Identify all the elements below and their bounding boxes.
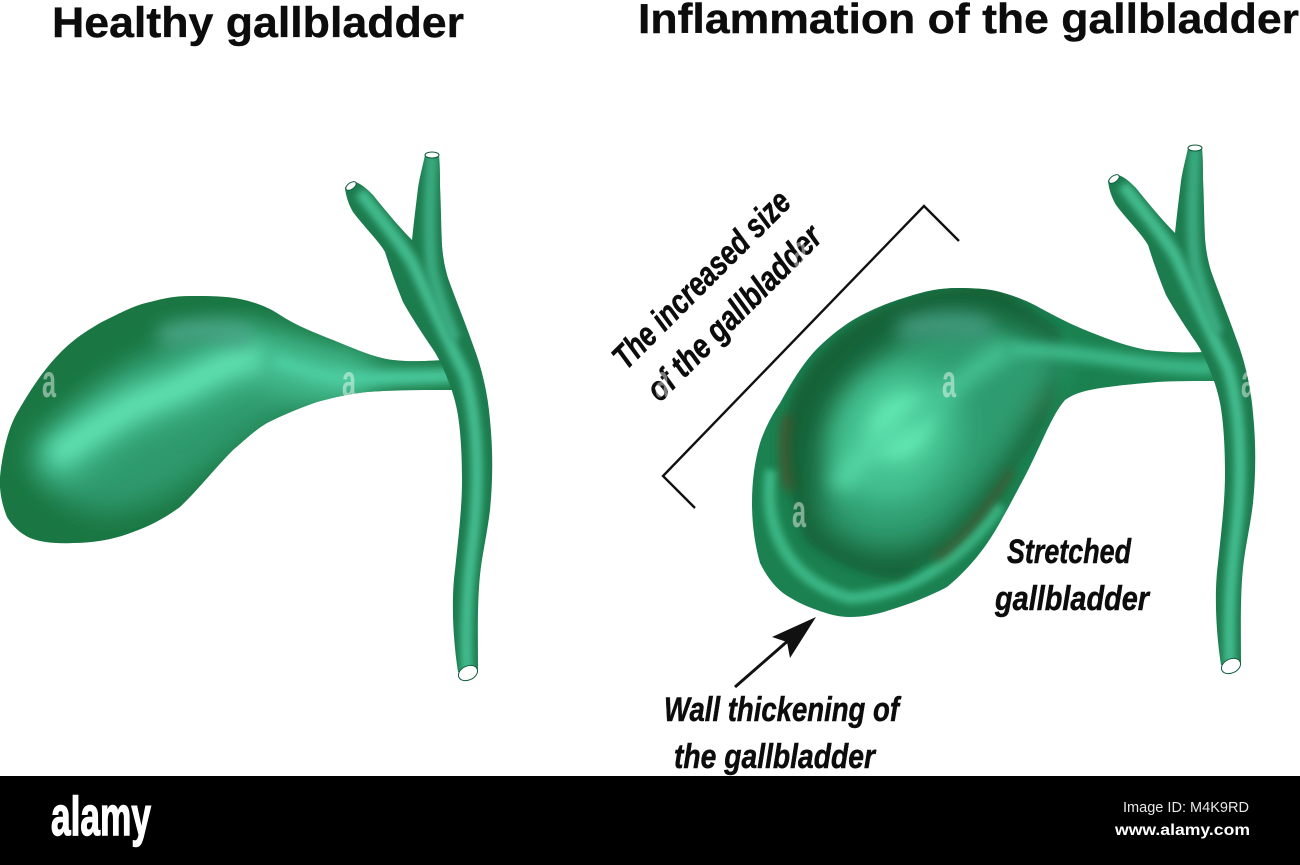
- watermarks: a: [1241, 355, 1255, 407]
- sac mid tone: [821, 322, 1070, 550]
- watermarks: a: [942, 355, 956, 407]
- label: wall thickening: Wall thickening of: [664, 691, 902, 729]
- watermarks: a: [655, 355, 669, 407]
- watermarks: [42, 225, 1255, 537]
- watermarks: a: [792, 485, 806, 537]
- label: the increased size: The increased size: [605, 183, 799, 377]
- healthy bile duct: [345, 156, 492, 672]
- sac teal top: [900, 324, 990, 332]
- neck shading: [1010, 350, 1215, 368]
- bracket: increased size: [663, 206, 959, 508]
- footer logo: alamy: [51, 785, 151, 847]
- title: healthy gallbladder: Healthy gallbladder: [52, 0, 464, 47]
- watermarks: a: [342, 355, 356, 407]
- label: stretched gallbladder: gallbladder: [994, 580, 1150, 618]
- label: wall thickening: the gallbladder: [674, 738, 876, 776]
- illustration: inflamed gallbladder: [745, 138, 1263, 677]
- footer bar: [0, 776, 1300, 865]
- inflamed gallbladder body: [745, 280, 1220, 625]
- brown shading: [784, 415, 790, 490]
- watermarks: a: [42, 355, 56, 407]
- label: stretched gallbladder: Stretched: [1007, 533, 1132, 571]
- arrow: to wall: [735, 617, 816, 687]
- illustration: healthy gallbladder: [0, 145, 500, 684]
- sac glow: [814, 352, 969, 514]
- healthy gallbladder body: [0, 285, 460, 555]
- label: wall thickening: [664, 691, 902, 776]
- inner sac shadow: [786, 285, 1060, 580]
- footer url: www.alamy.com: [1114, 822, 1250, 839]
- sac highlight: [862, 386, 938, 467]
- label: of the gallbladder: of the gallbladder: [639, 217, 831, 409]
- healthy duct openings: [344, 152, 480, 684]
- watermarks: a: [793, 225, 807, 277]
- image id: Image ID: M4K9RD: [1123, 799, 1249, 816]
- inflamed bile duct: [1103, 138, 1263, 677]
- label: stretched gallbladder: [994, 533, 1150, 618]
- wall highlight: [769, 470, 1000, 598]
